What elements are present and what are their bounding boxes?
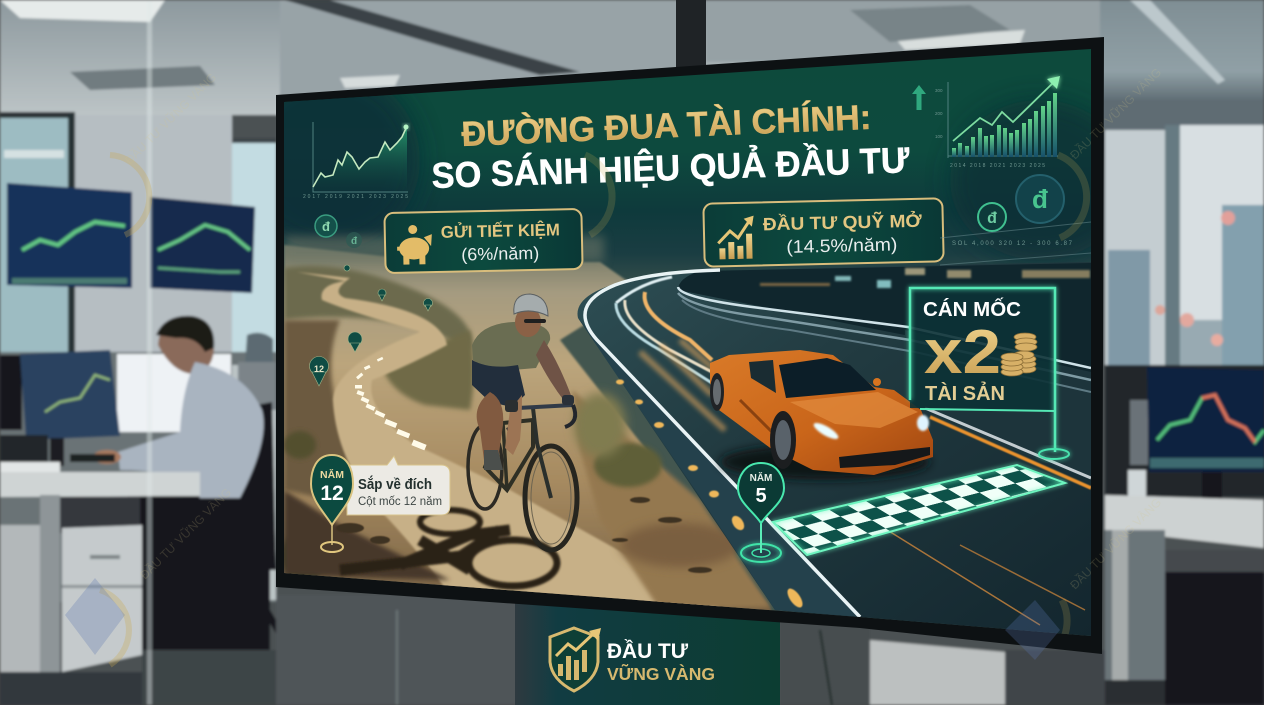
wall monitors bbox=[7, 183, 255, 293]
currency coins left: đ bbox=[351, 236, 358, 247]
desert scene bbox=[281, 236, 780, 640]
pin marker bbox=[311, 455, 353, 525]
year 12 pin and bubble: 12 bbox=[320, 482, 344, 505]
small distance pins bbox=[310, 265, 432, 386]
savings label pill bbox=[384, 209, 583, 273]
side window bbox=[749, 360, 776, 393]
savings label pill: (6%/năm) bbox=[461, 243, 539, 264]
year 5 pin bbox=[738, 463, 784, 562]
right growth chart bbox=[935, 76, 1060, 169]
screen background bbox=[284, 49, 1091, 649]
currency coins right: SOL 4,000 320 12 - 300 6.87 bbox=[952, 241, 1073, 247]
brand logo: ĐẦU TƯ bbox=[607, 638, 688, 663]
logo backing panel bbox=[515, 595, 780, 705]
currency coins right: đ bbox=[987, 210, 997, 227]
double wealth milestone banner: CÁN MỐC bbox=[923, 297, 1021, 321]
title line 1: ĐƯỜNG ĐUA TÀI CHÍNH: bbox=[461, 97, 872, 154]
road centre dashes bbox=[355, 357, 427, 450]
right growth chart: 300 bbox=[935, 88, 943, 93]
right growth chart: 200 bbox=[935, 111, 943, 116]
windshield bbox=[779, 358, 876, 398]
icon: rising bars bbox=[718, 216, 755, 259]
watermark text: ĐẦU TƯ VỮNG VÀNG bbox=[1067, 495, 1164, 592]
cyclist bbox=[468, 294, 577, 550]
right growth chart: 2014 2018 2021 2023 2025 bbox=[950, 163, 1045, 169]
infographic screen bbox=[284, 49, 1091, 636]
brand logo bbox=[550, 628, 715, 691]
watermarks on background bbox=[100, 155, 149, 665]
left stock chart bbox=[303, 122, 408, 200]
watermark diamonds bbox=[65, 578, 1060, 660]
milestone bubble bbox=[347, 456, 450, 515]
icon: coin stacks bbox=[1001, 333, 1037, 376]
road stud lights bbox=[616, 380, 805, 610]
road bbox=[577, 262, 1091, 640]
rider bbox=[472, 322, 550, 372]
milestone bubble: Sắp về đích bbox=[358, 475, 432, 493]
double wealth milestone banner: x2 bbox=[924, 318, 1001, 387]
bicycle wheels bbox=[468, 425, 577, 550]
double wealth milestone banner: TÀI SẢN bbox=[925, 382, 1005, 405]
monitor stand pole bbox=[676, 0, 706, 68]
currency coins right bbox=[940, 175, 1091, 265]
ceiling bbox=[0, 0, 1100, 115]
watermark text: ĐẦU TƯ VỮNG VÀNG bbox=[137, 485, 234, 582]
wheels bbox=[770, 411, 796, 469]
year 12 pin and bubble: NĂM bbox=[320, 468, 344, 481]
floor bbox=[0, 0, 516, 705]
fund label pill bbox=[703, 198, 944, 267]
left office wall and windows bbox=[0, 112, 276, 365]
bushes and soil bbox=[572, 390, 770, 610]
sports car bbox=[710, 350, 933, 480]
right growth chart: 100 bbox=[935, 134, 943, 139]
currency coins left: đ bbox=[322, 219, 330, 234]
winding dirt road bbox=[300, 272, 720, 606]
pin label small 12: 12 bbox=[314, 364, 324, 374]
watermark text: ĐẦU TƯ VỮNG VÀNG bbox=[122, 70, 219, 167]
up arrow icon bbox=[912, 85, 926, 110]
brand logo: VỮNG VÀNG bbox=[607, 663, 715, 684]
currency coins right: đ bbox=[1032, 184, 1048, 214]
helmet bbox=[514, 294, 548, 316]
year 5 pin: 5 bbox=[755, 485, 767, 507]
year 5 pin: NĂM bbox=[750, 471, 772, 484]
icon: piggy bank bbox=[397, 225, 432, 265]
watermark text: ĐẦU TƯ VỮNG VÀNG bbox=[1067, 65, 1164, 162]
white edge line bbox=[585, 270, 860, 617]
year 12 pin and bubble bbox=[311, 455, 450, 552]
title line 2: SO SÁNH HIỆU QUẢ ĐẦU TƯ bbox=[431, 138, 910, 196]
left stock chart: 2017 2019 2021 2023 2025 bbox=[303, 194, 408, 200]
double wealth milestone banner bbox=[910, 288, 1069, 459]
cyclist shadow bbox=[340, 510, 557, 586]
desk, worker and cabinet bbox=[0, 316, 290, 693]
watermark text bbox=[122, 65, 1164, 592]
right office windows and desk bbox=[1100, 0, 1264, 705]
icon: shield bbox=[550, 628, 601, 691]
monitor bezel bbox=[276, 37, 1104, 654]
currency coins left bbox=[315, 215, 362, 248]
fund label text: ĐẦU TƯ QUỸ MỞ bbox=[763, 210, 923, 234]
grille bbox=[839, 447, 930, 468]
speed streaks bbox=[616, 277, 1091, 625]
bicycle frame bbox=[485, 405, 575, 498]
watermark arcs on screen bbox=[585, 155, 1087, 666]
checkered finish line bbox=[760, 450, 1080, 570]
fund label pill: (14.5%/năm) bbox=[786, 234, 898, 257]
headlights bbox=[812, 420, 840, 442]
bottom cabinet bbox=[780, 620, 1105, 705]
savings label text: GỬI TIẾT KIỆM bbox=[441, 220, 560, 242]
milestone bubble: Cột mốc 12 năm bbox=[358, 496, 442, 508]
distant lights bbox=[760, 268, 1090, 288]
